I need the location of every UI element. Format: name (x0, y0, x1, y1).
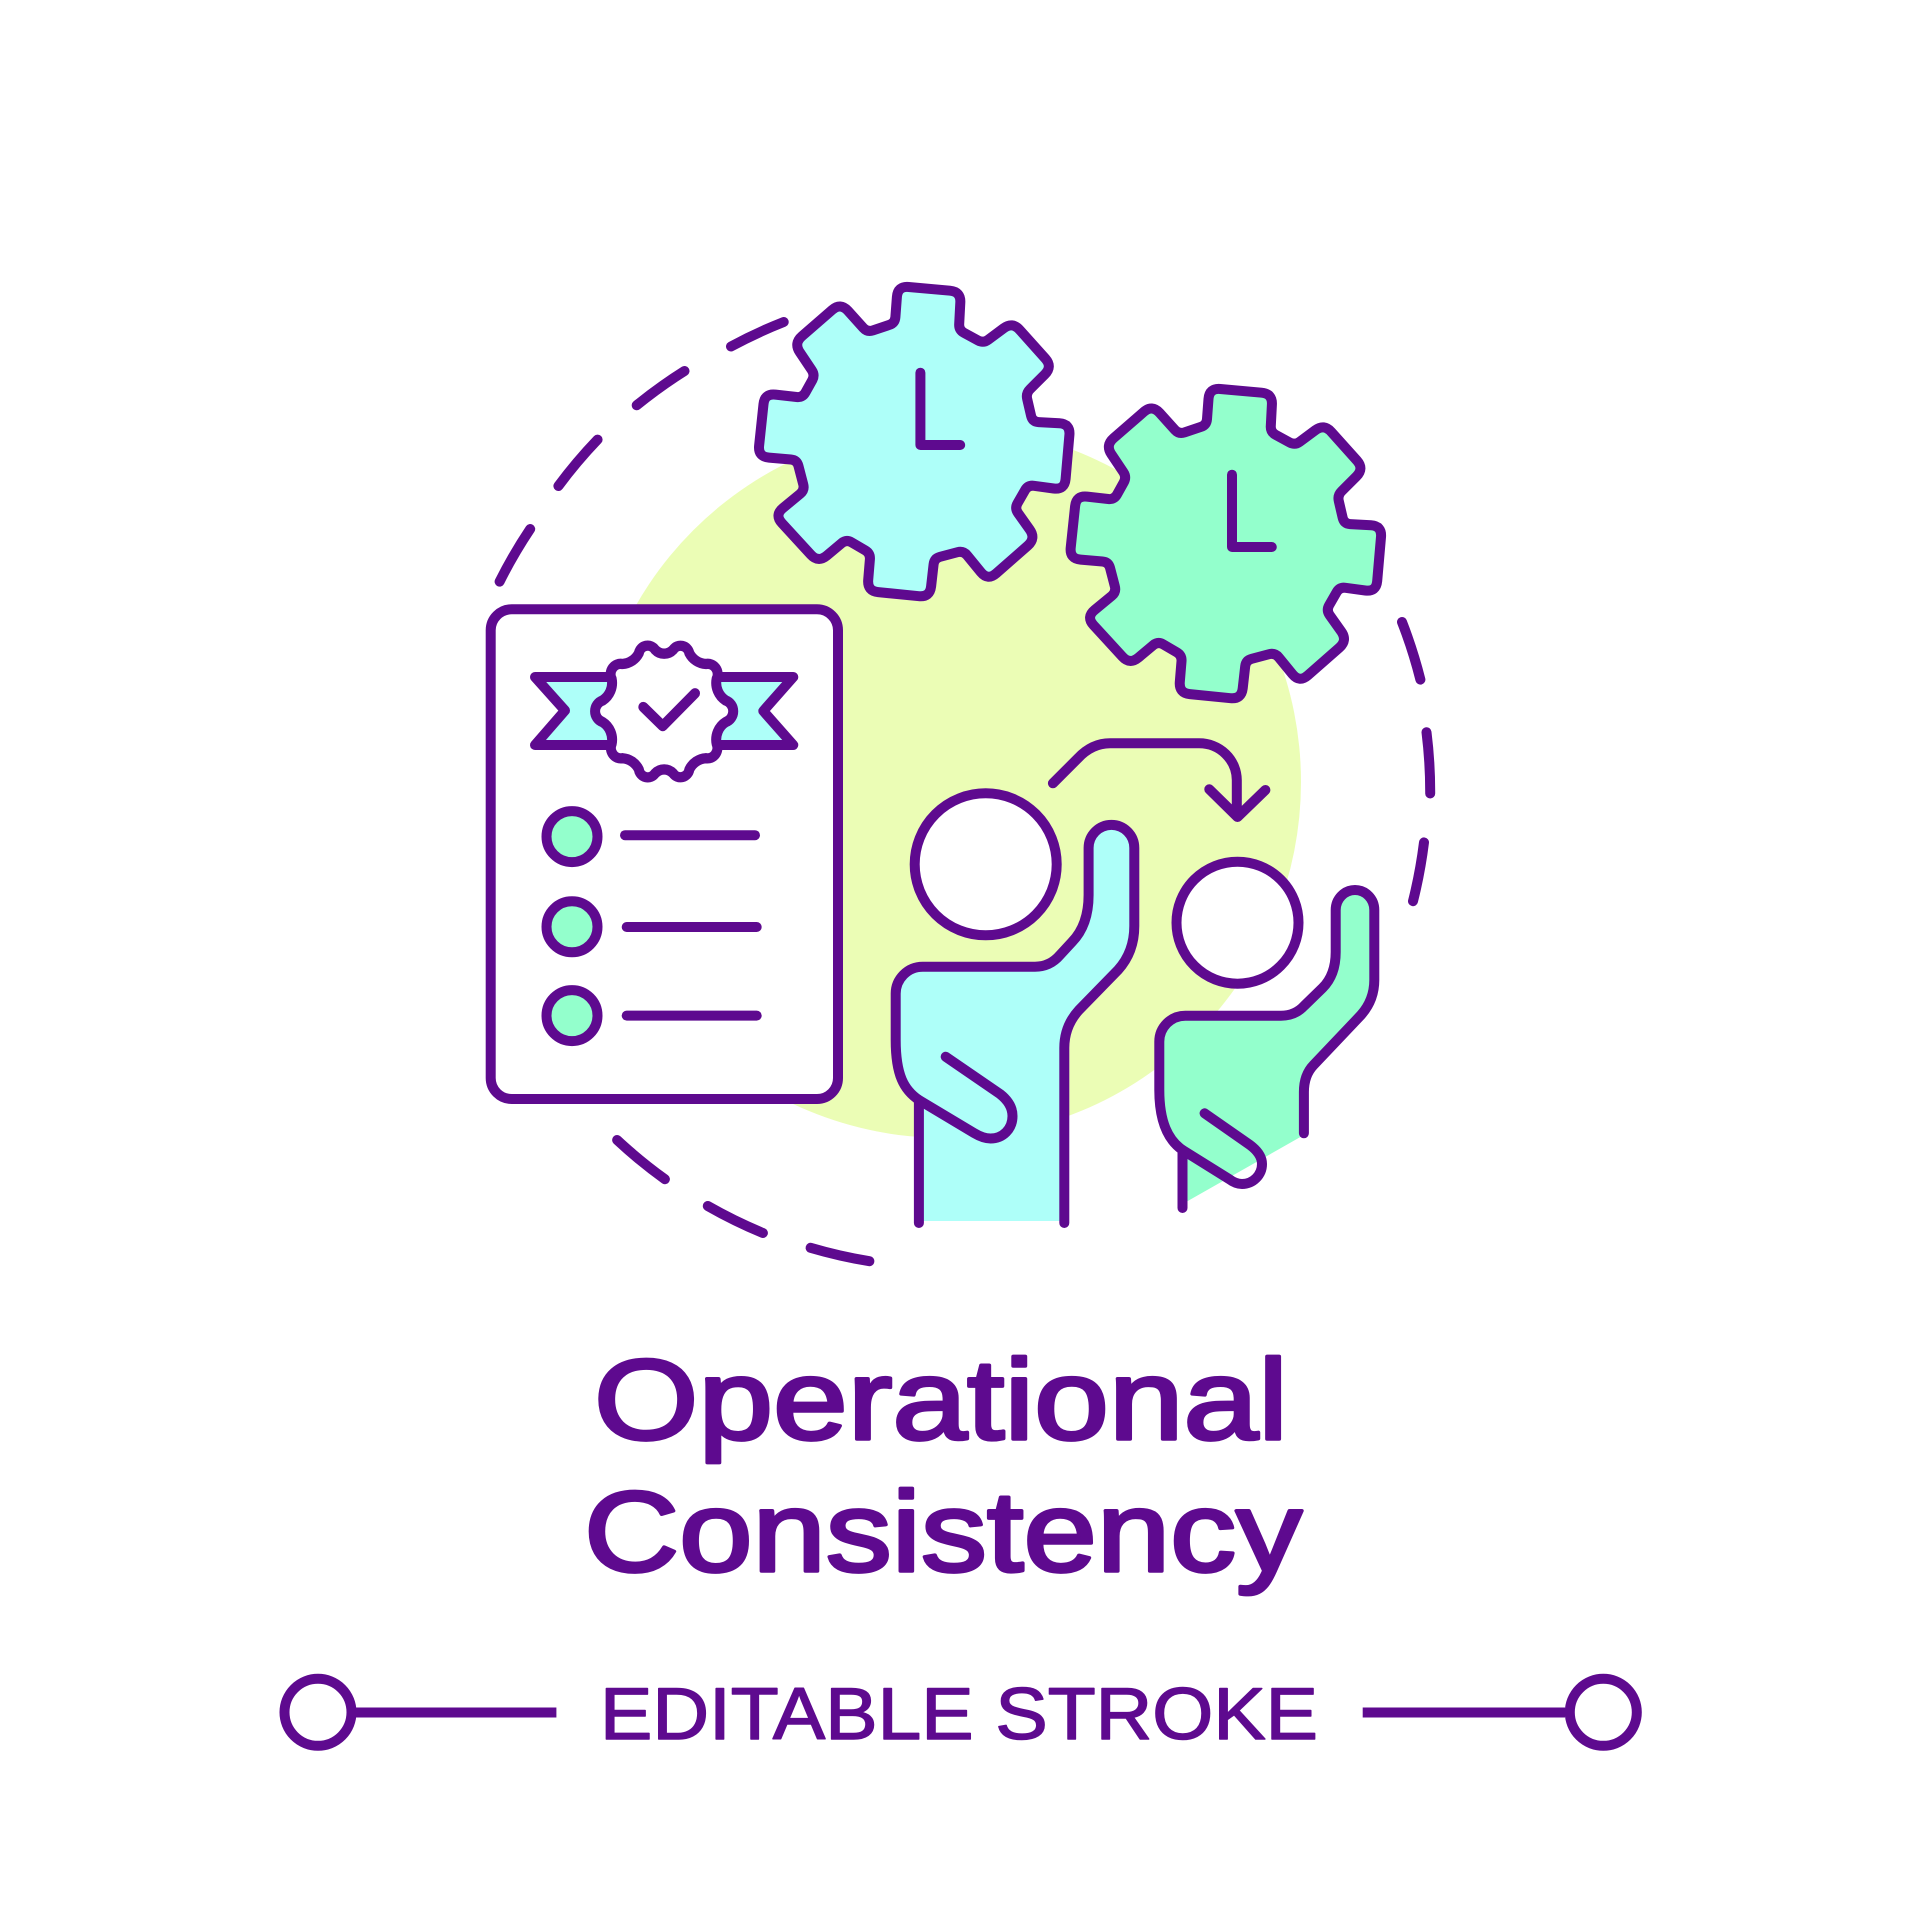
list item 1 (546, 811, 755, 862)
footer: editable stroke banner: EDITABLE STROKE (600, 1674, 1318, 1755)
arrow: curved handoff (1053, 743, 1265, 817)
person: small figure (1159, 862, 1374, 1208)
icon: ribbon right (708, 677, 793, 745)
person: large figure (896, 793, 1134, 1223)
title: Operational (594, 1337, 1288, 1464)
list item 3 (546, 990, 757, 1041)
icon: cyan gear with clock (759, 287, 1069, 596)
list item 2 (546, 901, 757, 952)
head: small figure (1176, 862, 1298, 984)
icon: badge (595, 646, 733, 777)
head: large figure (915, 793, 1057, 935)
icon: green gear with clock (1071, 389, 1381, 698)
icon: check mark (643, 693, 695, 726)
background circle (589, 426, 1301, 1138)
title (584, 1337, 1302, 1596)
icon: ribbon left (535, 677, 622, 745)
title: Consistency (584, 1469, 1302, 1596)
panel: certificate document (491, 609, 838, 1099)
dashed ring (500, 322, 1430, 1261)
footer: editable stroke banner (284, 1674, 1637, 1755)
